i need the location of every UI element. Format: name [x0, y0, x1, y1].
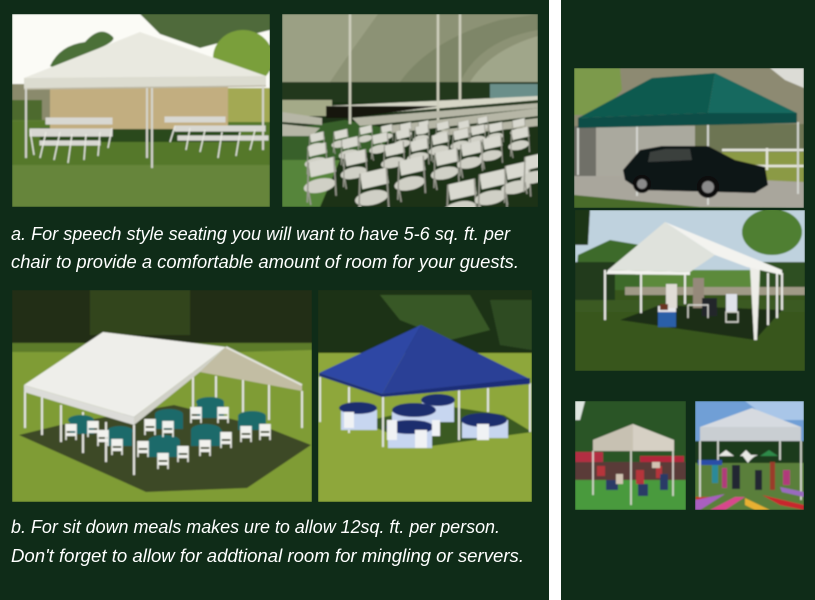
photo: green canopy over black car — [574, 68, 804, 208]
caption a — [11, 224, 519, 272]
photo: white tent with wall and folding chairs — [12, 14, 273, 207]
white divider column — [549, 0, 561, 600]
photo: white tent with crowd under trees — [575, 401, 686, 510]
caption b: b. For sit down meals makes ure to allow 12sq. ft. per person. — [11, 517, 500, 537]
photo: white canopy with people on lawn — [575, 209, 805, 371]
photo: large white tent with teal round tables — [12, 290, 312, 502]
photo: white tent over colorful mats — [695, 401, 804, 510]
photo: blue canopy tent with tables — [318, 290, 532, 502]
photo: long rows of chairs under a tent — [282, 14, 538, 207]
caption a: a. For speech style seating you will want to have 5-6 sq. ft. per — [11, 224, 511, 244]
caption b — [11, 517, 524, 566]
caption a: chair to provide a comfortable amount of room for your guests. — [11, 252, 519, 272]
caption b: Don't forget to allow for addtional room for mingling or servers. — [11, 546, 524, 566]
